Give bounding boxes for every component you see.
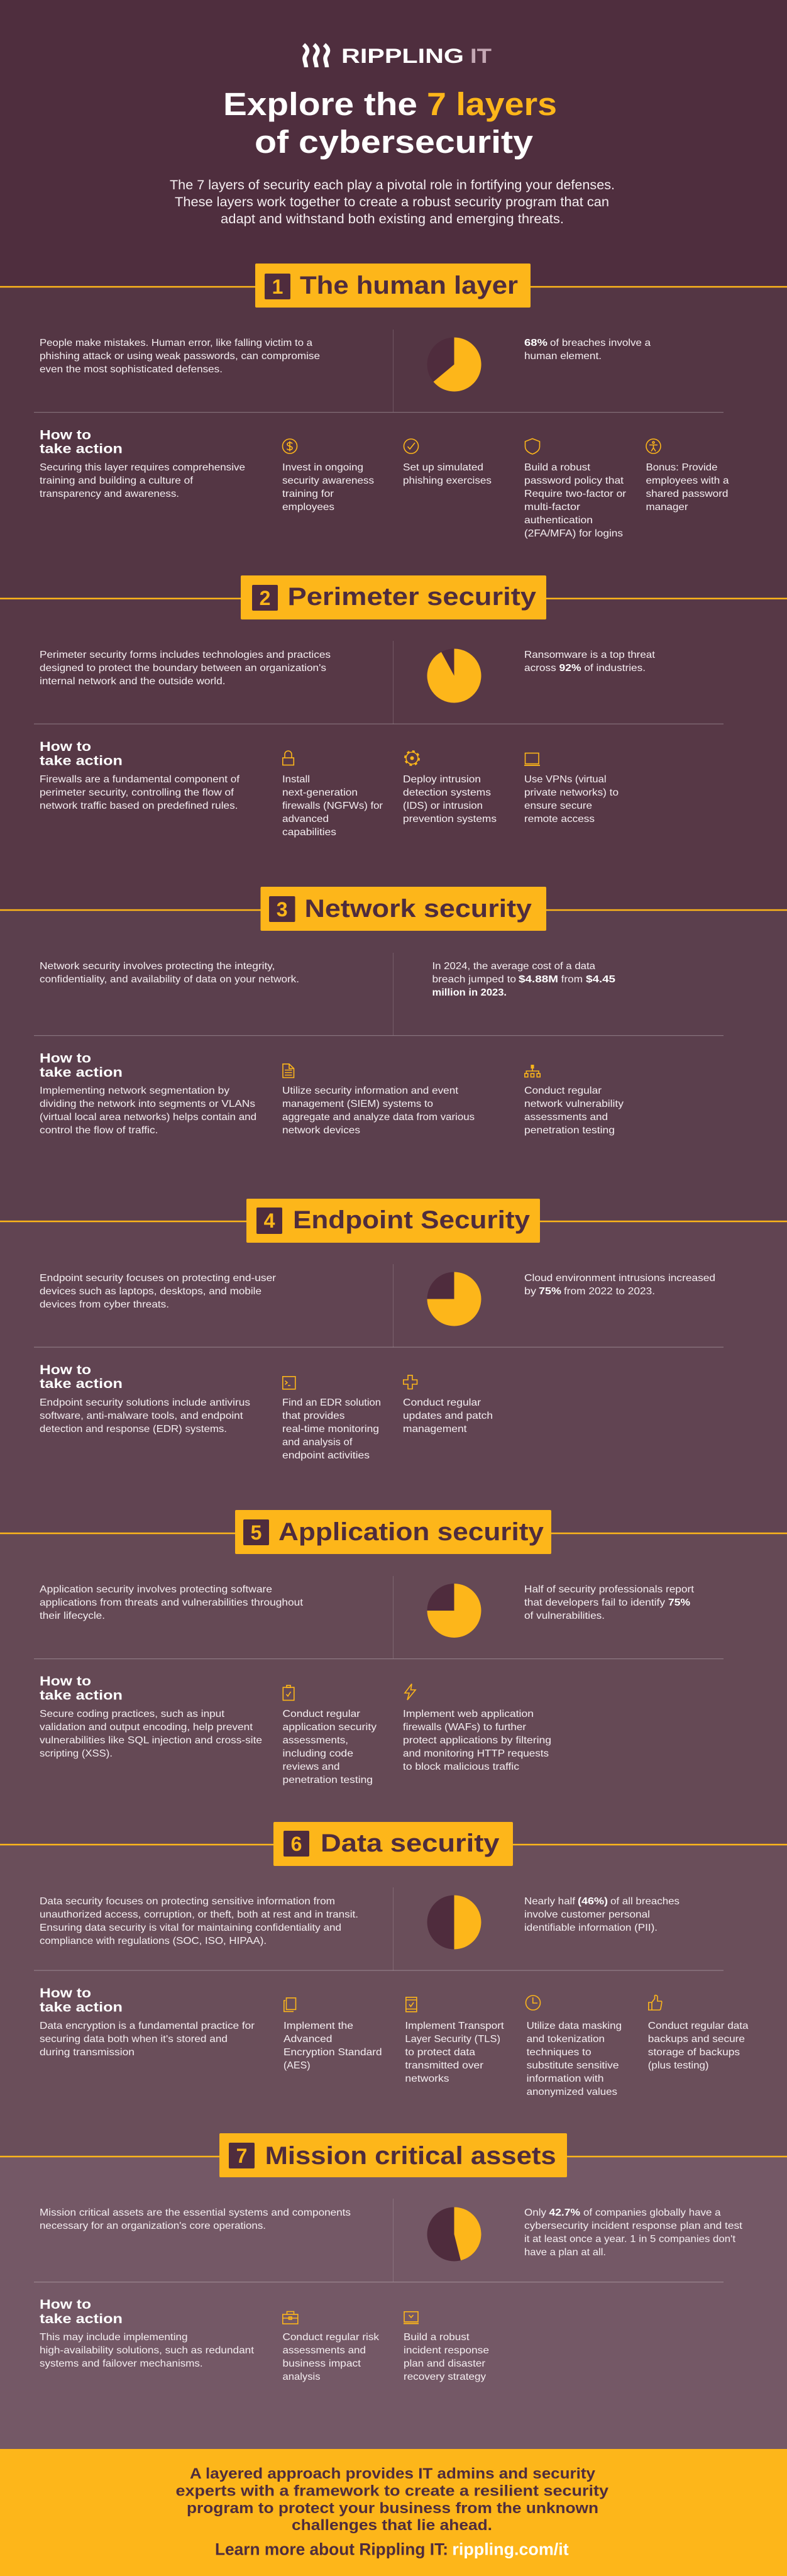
- description text: necessary for an organization's core operations.: [40, 2221, 266, 2231]
- action: security assessments: Conduct regular: [283, 1709, 361, 1719]
- action: TLS: Implement Transport: [405, 2021, 504, 2031]
- description text: internal network and the outside world.: [40, 676, 225, 687]
- stat text: $4.88M: [519, 974, 558, 985]
- action: AES: Encryption Standard: [283, 2047, 382, 2058]
- stat text: that developers fail to identify: [524, 1597, 665, 1608]
- how to take action: validation and output encoding, help prevent: [40, 1722, 253, 1733]
- stat text: identifiable information (PII).: [524, 1923, 658, 1933]
- action: next-generation firewalls: next-generation: [282, 787, 358, 798]
- stat text: across: [524, 663, 556, 674]
- action: TLS: networks: [405, 2074, 449, 2084]
- action: next-generation firewalls: Install: [282, 774, 310, 785]
- pie chart: 92%: [427, 649, 482, 703]
- pie chart: 68%: [427, 337, 482, 391]
- action: EDR solution: real-time monitoring: [282, 1424, 379, 1435]
- action: security assessments: penetration testing: [283, 1775, 373, 1785]
- action: incident response: plan and disaster: [404, 2358, 486, 2369]
- description text: [40, 338, 320, 375]
- description text: Network security involves protecting the integrity,: [40, 961, 275, 972]
- action: AES: Implement the: [283, 2021, 353, 2031]
- action: intrusion detection: Deploy intrusion: [403, 774, 481, 785]
- how to take action: [40, 1052, 256, 1136]
- stat text: from: [561, 974, 583, 985]
- action: EDR solution: endpoint activities: [282, 1450, 370, 1461]
- action: EDR solution: and analysis of: [282, 1437, 353, 1448]
- action: incident response: [404, 2312, 489, 2382]
- action: vulnerability assessments: penetration testing: [524, 1125, 615, 1136]
- panel: footer call to action: [0, 2449, 787, 2576]
- action: awareness training: Invest in ongoing: [282, 462, 363, 473]
- action: TLS: [405, 1997, 504, 2084]
- action: AES: [283, 1998, 382, 2071]
- action: updates and patches: updates and patch: [403, 1411, 493, 1421]
- stat text: cybersecurity incident response plan and test: [524, 2221, 743, 2231]
- how to take action: network traffic based on predefined rules.: [40, 801, 238, 811]
- pie chart: half: [427, 1896, 482, 1950]
- action: data masking: and tokenization: [527, 2034, 605, 2045]
- action: AES: Advanced: [283, 2034, 332, 2045]
- action: VPNs: private networks) to: [524, 787, 619, 798]
- action: VPNs: remote access: [524, 814, 595, 824]
- heading: application security: [235, 1510, 551, 1554]
- how to take action: Data encryption is a fundamental practice for: [40, 2021, 255, 2031]
- description text: People make mistakes. Human error, like falling victim to a: [40, 338, 312, 348]
- how to take action: detection and response (EDR) systems.: [40, 1424, 227, 1435]
- action: vulnerability assessments: [524, 1065, 624, 1136]
- how to take action: take action: [40, 754, 123, 769]
- action: data masking: [526, 1996, 622, 2097]
- action: EDR solution: that provides: [282, 1411, 344, 1421]
- title: of cybersecurity: [255, 124, 534, 160]
- how to take action: software, anti-malware tools, and endpoint: [40, 1411, 243, 1421]
- stat text: of industries.: [584, 663, 646, 674]
- stat text: (46%): [578, 1896, 608, 1907]
- how to take action: [40, 740, 240, 811]
- logo: Rippling IT: RIPPLING: [341, 45, 464, 67]
- action: EDR solution: [282, 1377, 381, 1461]
- description text: [40, 2207, 351, 2231]
- stat text: $4.45: [586, 974, 615, 985]
- action: intrusion detection: prevention systems: [403, 814, 497, 824]
- action: web application firewalls: protect applications by filtering: [403, 1735, 551, 1746]
- action: password policy: multi-factor: [524, 502, 581, 513]
- description text: Application security involves protecting software: [40, 1584, 272, 1595]
- description text: compliance with regulations (SOC, ISO, HIPAA).: [40, 1936, 267, 1946]
- how to take action: dividing the network into segments or VLANs: [40, 1099, 255, 1109]
- stat text: Cloud environment intrusions increased: [524, 1273, 715, 1284]
- action: EDR solution: Find an EDR solution: [282, 1397, 381, 1408]
- stat text: [432, 961, 615, 998]
- footer link: Learn more about Rippling IT:: [215, 2540, 448, 2558]
- heading: application security: 5: [251, 1521, 261, 1544]
- action: TLS: transmitted over: [405, 2060, 484, 2071]
- stat text: by: [524, 1286, 536, 1297]
- heading: mission critical assets: [219, 2133, 567, 2177]
- action: password manager: Bonus: Provide: [646, 462, 718, 473]
- action: web application firewalls: and monitoring HTTP requests: [403, 1748, 549, 1759]
- description text: Mission critical assets are the essential systems and components: [40, 2207, 351, 2218]
- how to take action: take action: [40, 1377, 123, 1391]
- description text: [40, 961, 299, 985]
- footer link: rippling.com/it: [452, 2540, 569, 2558]
- heading: perimeter security: [241, 575, 546, 619]
- heading: endpoint security: 4: [264, 1209, 275, 1232]
- pie chart: 75%: [427, 1272, 482, 1326]
- action: risk assessments: analysis: [283, 2372, 321, 2382]
- how to take action: take action: [40, 442, 123, 457]
- action: intrusion detection: [403, 751, 497, 824]
- how to take action: This may include implementing: [40, 2332, 188, 2343]
- heading: endpoint security: Endpoint Security: [293, 1206, 531, 1234]
- stat text: 92%: [559, 663, 581, 674]
- stat text: 75%: [539, 1286, 561, 1297]
- how to take action: systems and failover mechanisms.: [40, 2358, 203, 2369]
- action: data backups: backups and secure: [648, 2034, 745, 2045]
- action: web application firewalls: Implement web application: [403, 1709, 534, 1719]
- how to take action: control the flow of traffic.: [40, 1125, 158, 1136]
- action: security assessments: reviews and: [283, 1762, 339, 1772]
- action: risk assessments: business impact: [283, 2358, 361, 2369]
- how to take action: How to: [40, 740, 91, 754]
- description text: even the most sophisticated defenses.: [40, 364, 223, 375]
- stat text: million in 2023.: [432, 987, 507, 998]
- action: data masking: substitute sensitive: [527, 2060, 619, 2071]
- how to take action: training and building a culture of: [40, 475, 194, 486]
- action: VPNs: Use VPNs (virtual: [524, 774, 606, 785]
- heading: application security: Application security: [278, 1518, 544, 1546]
- header panel: [0, 0, 787, 287]
- how to take action: How to: [40, 2297, 91, 2312]
- action: data backups: [648, 1996, 749, 2071]
- action: phishing exercises: [403, 439, 492, 486]
- description text: Endpoint security focuses on protecting end-user: [40, 1273, 277, 1284]
- action: data backups: Conduct regular data: [648, 2021, 749, 2031]
- how to take action: Firewalls are a fundamental component of: [40, 774, 240, 785]
- action: SIEM systems: aggregate and analyze data from various: [282, 1112, 475, 1123]
- panel: section 4 endpoint security: [0, 1199, 787, 1533]
- action: password policy: Build a robust: [524, 462, 591, 473]
- footer message: experts with a framework to create a resilient security: [176, 2483, 609, 2499]
- how to take action: high-availability solutions, such as redundant: [40, 2345, 255, 2356]
- how to take action: transparency and awareness.: [40, 489, 179, 499]
- action: incident response: recovery strategy: [404, 2372, 486, 2382]
- how to take action: scripting (XSS).: [40, 1748, 113, 1759]
- how to take action: take action: [40, 2312, 123, 2326]
- stat text: [524, 2207, 743, 2258]
- stat text: of breaches involve a: [550, 338, 651, 348]
- action: data masking: information with: [527, 2074, 603, 2084]
- action: vulnerability assessments: assessments and: [524, 1112, 608, 1123]
- action: TLS: to protect data: [405, 2047, 475, 2058]
- stat text: [524, 650, 656, 674]
- description text: Perimeter security forms includes technologies and practices: [40, 650, 331, 660]
- panel: section 3 network security: [0, 887, 787, 1221]
- action: SIEM systems: Utilize security information and event: [282, 1085, 459, 1096]
- heading: the human layer: The human layer: [300, 272, 518, 299]
- heading: network security: Network security: [304, 895, 532, 923]
- action: password policy: password policy that: [524, 475, 624, 486]
- action: password manager: employees with a: [646, 475, 729, 486]
- how to take action: securing data both when it's stored and: [40, 2034, 228, 2045]
- stat text: Nearly half: [524, 1896, 576, 1907]
- action: data backups: storage of backups: [648, 2047, 740, 2058]
- stat text: 75%: [668, 1597, 690, 1608]
- action: vulnerability assessments: Conduct regular: [524, 1085, 602, 1096]
- action: intrusion detection: (IDS) or intrusion: [403, 801, 483, 811]
- panel: section 6 data security: [0, 1822, 787, 2157]
- action: VPNs: [524, 753, 619, 824]
- action: updates and patches: Conduct regular: [403, 1397, 482, 1408]
- action: risk assessments: Conduct regular risk: [283, 2332, 380, 2343]
- action: risk assessments: assessments and: [283, 2345, 366, 2356]
- action: updates and patches: [403, 1375, 493, 1435]
- action: awareness training: training for: [282, 489, 334, 499]
- stat text: Only: [524, 2207, 546, 2218]
- heading: perimeter security: Perimeter security: [288, 583, 537, 611]
- stat text: it at least once a year. 1 in 5 companies don't: [524, 2234, 736, 2245]
- action: SIEM systems: [282, 1064, 475, 1136]
- how to take action: take action: [40, 1065, 123, 1080]
- description text: unauthorized access, corruption, or theft, both at rest and in transit.: [40, 1909, 358, 1920]
- action: incident response: Build a robust: [404, 2332, 470, 2343]
- action: password policy: authentication: [524, 515, 593, 526]
- stat text: of vulnerabilities.: [524, 1611, 605, 1621]
- stat text: of companies globally have a: [583, 2207, 721, 2218]
- stat text: [524, 338, 651, 362]
- description text: devices such as laptops, desktops, and mobile: [40, 1286, 261, 1297]
- action: security assessments: application security: [283, 1722, 377, 1733]
- action: updates and patches: management: [403, 1424, 467, 1435]
- how to take action: [40, 1986, 255, 2058]
- panel: section 1 the human layer: [0, 264, 787, 599]
- how to take action: How to: [40, 1363, 91, 1377]
- action: next-generation firewalls: advanced: [282, 814, 329, 824]
- action: security assessments: assessments,: [283, 1735, 348, 1746]
- action: web application firewalls: to block malicious traffic: [403, 1762, 519, 1772]
- action: awareness training: [282, 439, 374, 513]
- how to take action: [40, 1363, 250, 1435]
- action: next-generation firewalls: [282, 751, 383, 838]
- intro text: The 7 layers of security each play a pivotal role in fortifying your defenses.: [170, 178, 615, 192]
- action: data masking: anonymized values: [527, 2087, 617, 2097]
- action: password manager: manager: [646, 502, 688, 513]
- description text: [40, 1273, 277, 1310]
- heading: network security: 3: [277, 898, 288, 921]
- how to take action: [40, 2297, 255, 2369]
- logo: Rippling IT: [304, 45, 492, 67]
- stat text: [524, 1584, 695, 1621]
- action: web application firewalls: firewalls (WAFs) to further: [403, 1722, 527, 1733]
- how to take action: take action: [40, 1689, 123, 1703]
- footer message: program to protect your business from the unknown: [187, 2500, 598, 2517]
- title: 7 layers: [427, 86, 557, 122]
- description text: applications from threats and vulnerabilities throughout: [40, 1597, 304, 1608]
- how to take action: during transmission: [40, 2047, 135, 2058]
- action: SIEM systems: management (SIEM) systems to: [282, 1099, 433, 1109]
- action: security assessments: including code: [283, 1748, 353, 1759]
- heading: mission critical assets: Mission critical assets: [265, 2142, 556, 2170]
- footer message: [176, 2465, 609, 2534]
- title: Explore the: [223, 86, 417, 122]
- action: password manager: [646, 439, 729, 513]
- description text: [40, 1584, 304, 1621]
- description text: phishing attack or using weak passwords, can compromise: [40, 351, 320, 362]
- stat text: have a plan at all.: [524, 2247, 606, 2258]
- stat text: breach jumped to: [432, 974, 516, 985]
- heading: endpoint security: [246, 1199, 540, 1243]
- stat text: Ransomware is a top threat: [524, 650, 656, 660]
- heading: the human layer: [255, 264, 531, 308]
- footer message: challenges that lie ahead.: [292, 2517, 492, 2534]
- stat text: involve customer personal: [524, 1909, 650, 1920]
- action: phishing exercises: Set up simulated: [403, 462, 483, 473]
- description text: Data security focuses on protecting sensitive information from: [40, 1896, 335, 1907]
- stat text: [524, 1896, 680, 1933]
- how to take action: [40, 1674, 262, 1759]
- action: data masking: Utilize data masking: [527, 2021, 622, 2031]
- stat text: [524, 1273, 715, 1297]
- heading: perimeter security: 2: [260, 587, 270, 609]
- action: data backups: (plus testing): [648, 2060, 709, 2071]
- logo: Rippling IT: IT: [470, 45, 492, 67]
- heading: network security: [260, 887, 546, 931]
- panel: section 7 mission critical assets: [0, 2133, 787, 2449]
- intro text: adapt and withstand both existing and emerging threats.: [221, 212, 564, 226]
- how to take action: take action: [40, 2000, 123, 2015]
- action: awareness training: security awareness: [282, 475, 374, 486]
- action: TLS: Layer Security (TLS): [405, 2034, 500, 2045]
- action: password manager: shared password: [646, 489, 728, 499]
- action: next-generation firewalls: capabilities: [282, 827, 336, 838]
- description text: [40, 1896, 358, 1946]
- how to take action: vulnerabilities like SQL injection and cross-site: [40, 1735, 262, 1746]
- description text: [40, 650, 331, 687]
- how to take action: How to: [40, 1674, 91, 1689]
- intro text: [170, 178, 615, 226]
- action: intrusion detection: detection systems: [403, 787, 491, 798]
- description text: confidentiality, and availability of data on your network.: [40, 974, 299, 985]
- heading: data security: 6: [291, 1833, 302, 1855]
- heading: mission critical assets: 7: [236, 2145, 247, 2167]
- intro text: These layers work together to create a robust security program that can: [175, 195, 609, 209]
- how to take action: Securing this layer requires comprehensive: [40, 462, 245, 473]
- action: password policy: [524, 439, 627, 539]
- stat text: human element.: [524, 351, 602, 362]
- stat text: In 2024, the average cost of a data: [432, 961, 595, 972]
- description text: Ensuring data security is vital for maintaining confidentiality and: [40, 1923, 341, 1933]
- how to take action: Secure coding practices, such as input: [40, 1709, 225, 1719]
- how to take action: Implementing network segmentation by: [40, 1085, 229, 1096]
- action: password policy: Require two-factor or: [524, 489, 627, 499]
- action: next-generation firewalls: firewalls (NGFWs) for: [282, 801, 383, 811]
- how to take action: How to: [40, 428, 91, 443]
- stat text: from 2022 to 2023.: [564, 1286, 655, 1297]
- action: phishing exercises: phishing exercises: [403, 475, 492, 486]
- stat text: Half of security professionals report: [524, 1584, 695, 1595]
- description text: designed to protect the boundary between an organization's: [40, 663, 326, 674]
- panel: section 5 application security: [0, 1510, 787, 1845]
- pie chart: 42.7%: [427, 2207, 482, 2262]
- footer message: A layered approach provides IT admins and security: [190, 2465, 596, 2482]
- heading: the human layer: 1: [272, 275, 283, 298]
- action: SIEM systems: network devices: [282, 1125, 360, 1136]
- how to take action: How to: [40, 1052, 91, 1065]
- action: AES: (AES): [283, 2060, 311, 2071]
- action: vulnerability assessments: network vulnerability: [524, 1099, 624, 1109]
- how to take action: How to: [40, 1986, 91, 2001]
- action: incident response: incident response: [404, 2345, 489, 2356]
- action: VPNs: ensure secure: [524, 801, 592, 811]
- footer link: [215, 2540, 569, 2558]
- action: data masking: techniques to: [527, 2047, 592, 2058]
- heading: data security: [273, 1822, 513, 1866]
- how to take action: [40, 428, 245, 499]
- stat text: of all breaches: [610, 1896, 680, 1907]
- action: risk assessments: [283, 2312, 380, 2382]
- how to take action: Endpoint security solutions include antivirus: [40, 1397, 250, 1408]
- description text: devices from cyber threats.: [40, 1299, 169, 1310]
- action: password policy: (2FA/MFA) for logins: [524, 528, 623, 539]
- action: security assessments: [283, 1685, 377, 1785]
- pie chart: 75%: [427, 1584, 482, 1638]
- stat text: 68%: [524, 338, 548, 348]
- action: web application firewalls: [403, 1684, 551, 1772]
- how to take action: (virtual local area networks) helps contain and: [40, 1112, 256, 1123]
- how to take action: perimeter security, controlling the flow of: [40, 787, 234, 798]
- stat text: 42.7%: [549, 2207, 580, 2218]
- title: [223, 86, 557, 160]
- description text: their lifecycle.: [40, 1611, 105, 1621]
- heading: data security: Data security: [321, 1829, 500, 1857]
- panel: section 2 perimeter security: [0, 575, 787, 910]
- action: awareness training: employees: [282, 502, 334, 513]
